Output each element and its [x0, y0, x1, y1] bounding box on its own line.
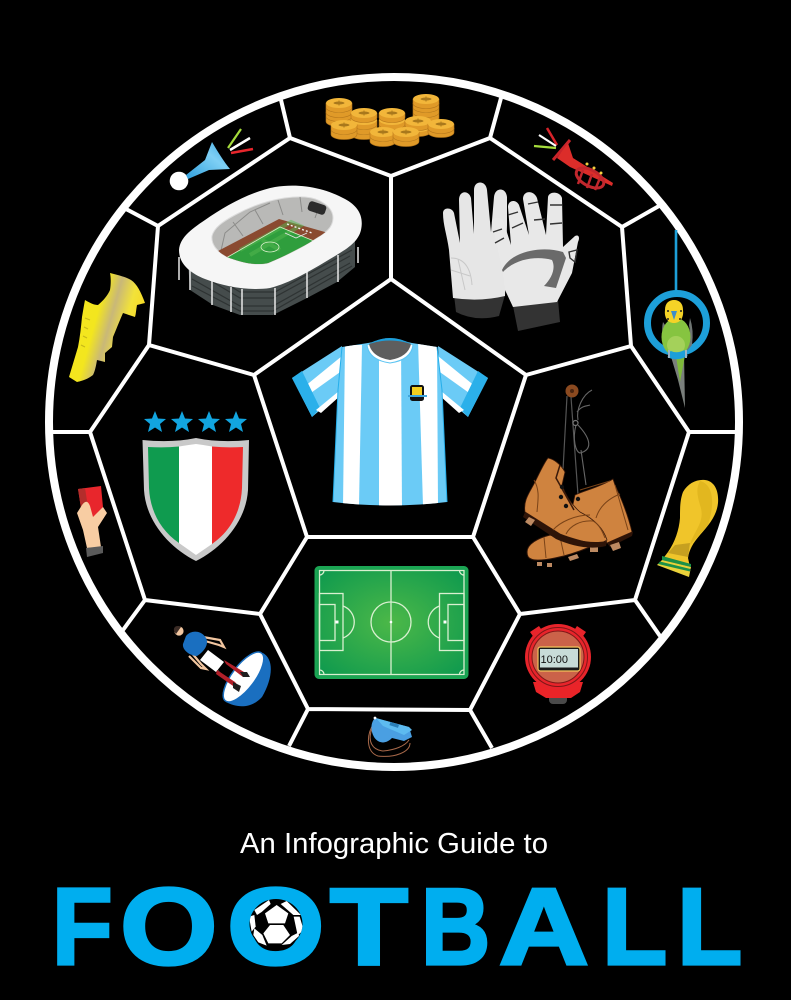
icon: stadium	[179, 186, 362, 315]
front boot	[523, 458, 607, 548]
left glove cuff	[454, 295, 505, 318]
icon: whistle	[368, 717, 412, 756]
icon: football shirt	[292, 338, 488, 510]
right glove cuff	[513, 300, 560, 331]
title: FOOTBALL: L	[677, 865, 742, 987]
title: FOOTBALL: O	[227, 866, 324, 987]
title: FOOTBALL: T	[330, 867, 408, 988]
icon: red card in hand	[77, 486, 107, 557]
icon: world cup trophy	[657, 480, 718, 577]
icon: stopwatch	[525, 624, 591, 704]
title: FOOTBALL: O	[120, 866, 217, 987]
title: FOOTBALL: A	[499, 865, 589, 987]
text: subtitle: An Infographic Guide to	[240, 828, 548, 860]
left glove	[443, 182, 507, 300]
icon: gold coins	[326, 94, 454, 146]
icon: budgerigar on perch	[648, 230, 706, 408]
right glove	[492, 192, 579, 307]
left sleeve	[292, 346, 343, 417]
icon: Italian shield	[142, 438, 249, 561]
crest	[408, 385, 427, 401]
football outline	[49, 77, 739, 767]
icon: old leather boots hanging	[523, 384, 633, 567]
rear boot	[570, 479, 633, 552]
title: FOOTBALL: L	[602, 865, 667, 987]
icon: football boot	[69, 273, 145, 382]
lower boot	[527, 535, 590, 567]
title: FOOTBALL: B	[421, 865, 490, 987]
title: FOOTBALL: F	[52, 867, 113, 988]
icon: goalkeeper gloves	[443, 182, 579, 331]
icon: trumpet	[534, 128, 613, 192]
title: FOOTBALL	[52, 865, 742, 988]
collar	[367, 338, 413, 363]
icon: football in the letter O	[249, 899, 304, 949]
icon: vuvuzela	[170, 129, 253, 190]
stopwatch time: 10:00	[540, 654, 568, 666]
shirt body	[333, 340, 447, 510]
right sleeve	[437, 346, 488, 417]
icon: table football figure	[174, 626, 271, 708]
icon: stars	[144, 411, 247, 432]
icon: football pitch	[316, 568, 467, 678]
